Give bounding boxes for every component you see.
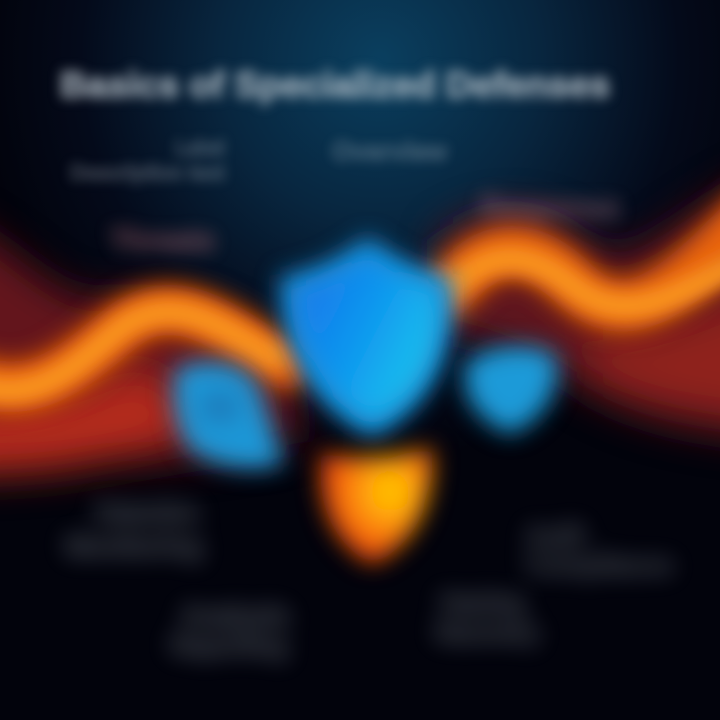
red wave band: [0, 170, 720, 475]
text block: right of wave: Response: [480, 189, 620, 225]
orange wave: [0, 215, 720, 390]
text block: lower centre right: [435, 587, 540, 648]
text block: left of wave: Threats: [110, 224, 215, 257]
icon: central shield: [280, 236, 453, 438]
text block: upper left: [70, 135, 226, 185]
text block: lower centre right: Recovery: [435, 617, 540, 648]
text block: lower centre left: Analysis: [180, 599, 290, 632]
text block: lower left: Detection: [95, 496, 200, 529]
text block: lower left: [65, 496, 203, 563]
text block: lower right: Audit: [525, 519, 585, 552]
text block: lower centre right: Patching: [440, 587, 525, 618]
text block: upper left: Description text: [70, 160, 226, 185]
text block: upper left: Label: [175, 135, 225, 160]
text block: lower left: Monitoring: [65, 530, 203, 563]
icon: left blue badge: [173, 362, 284, 469]
icon: right blue badge: [464, 346, 557, 434]
text block: lower right: [525, 519, 673, 580]
text block: lower right: Compliance: [525, 549, 673, 580]
icon: orange flame: [321, 448, 432, 564]
text block: lower centre left: Reporting: [170, 630, 288, 661]
text block: lower centre left: [170, 599, 290, 661]
text block: upper centre: Overview: [332, 136, 448, 166]
title: Basics of Specialized Defenses: [60, 64, 610, 105]
